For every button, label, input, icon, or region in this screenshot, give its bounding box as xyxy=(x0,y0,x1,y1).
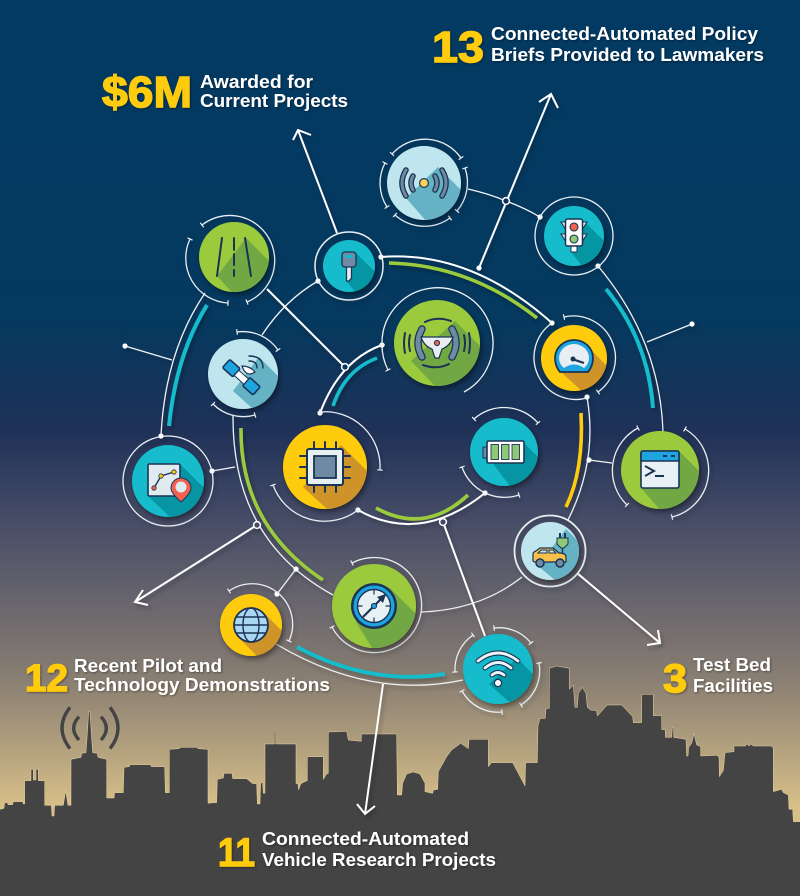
stat: 3 test beds: Test Bed xyxy=(693,655,771,675)
icon: battery xyxy=(470,418,544,492)
arrow to 11 research projects stat xyxy=(357,684,383,814)
stat: 13 policy briefs xyxy=(432,23,764,72)
stat: $6M awarded: Current Projects xyxy=(200,91,348,111)
bottom inner swirl with green accent xyxy=(355,490,488,636)
stat: $6M awarded xyxy=(102,68,348,117)
icon: speedometer gauge xyxy=(541,325,612,396)
arrow to $6M stat xyxy=(293,130,337,233)
icon: traffic light xyxy=(544,206,610,272)
icon: highway road xyxy=(199,222,274,297)
stat: 11 research projects: 11 xyxy=(218,831,255,875)
stat: 3 test beds xyxy=(663,655,773,701)
outer right arc with teal accent xyxy=(595,263,695,432)
stat: 12 demonstrations: 12 xyxy=(25,658,68,700)
arrow to 3 test beds stat xyxy=(577,573,660,645)
signal to traffic-light link xyxy=(468,189,543,220)
stat: 12 demonstrations: Recent Pilot and xyxy=(74,656,222,676)
top swirl arc with green accent xyxy=(378,254,555,326)
icon: globe xyxy=(220,594,287,661)
stat: 13 policy briefs: 13 xyxy=(432,23,484,72)
icon: microchip xyxy=(283,425,373,515)
icon: route map with pin xyxy=(132,445,210,523)
connecting network lines and arcs xyxy=(122,94,709,814)
icon: steering wheel xyxy=(394,300,485,391)
icon orbit arcs xyxy=(123,139,709,712)
icon: electric car with plug xyxy=(521,522,584,585)
stat: 11 research projects: Connected-Automated xyxy=(262,829,469,849)
stat: $6M awarded: $6M xyxy=(102,68,192,117)
icon: wifi xyxy=(463,634,538,709)
stat: 11 research projects: Vehicle Research Projects xyxy=(262,850,496,870)
compass to car link xyxy=(421,577,522,612)
arrow to 13 policy briefs stat xyxy=(479,94,558,268)
stat: 12 demonstrations xyxy=(25,656,330,700)
gauge to car arc with yellow accent xyxy=(566,394,612,520)
stat: 13 policy briefs: Connected-Automated Policy xyxy=(491,24,758,44)
globe to wifi arc with teal accent xyxy=(276,644,463,685)
icon: terminal window xyxy=(621,431,704,514)
stat: 3 test beds: Facilities xyxy=(693,676,773,696)
outer left arc with teal accent xyxy=(122,293,207,436)
icon: wireless signal xyxy=(387,146,466,225)
inner left arc with green accent xyxy=(209,415,333,597)
icon: satellite xyxy=(208,339,283,414)
stat: 3 test beds: 3 xyxy=(663,657,687,701)
stat: $6M awarded: Awarded for xyxy=(200,72,313,92)
radio tower signal waves xyxy=(62,707,118,749)
key, road and steering links xyxy=(262,278,385,416)
icon: car key xyxy=(323,240,379,296)
arrow to 12 demonstrations stat xyxy=(135,525,257,605)
city skyline silhouette xyxy=(0,666,800,896)
stat: 12 demonstrations: Technology Demonstrations xyxy=(74,675,330,695)
stat: 13 policy briefs: Briefs Provided to Lawmakers xyxy=(491,45,764,65)
stat: 11 research projects xyxy=(218,829,496,875)
icon: compass xyxy=(332,564,422,654)
